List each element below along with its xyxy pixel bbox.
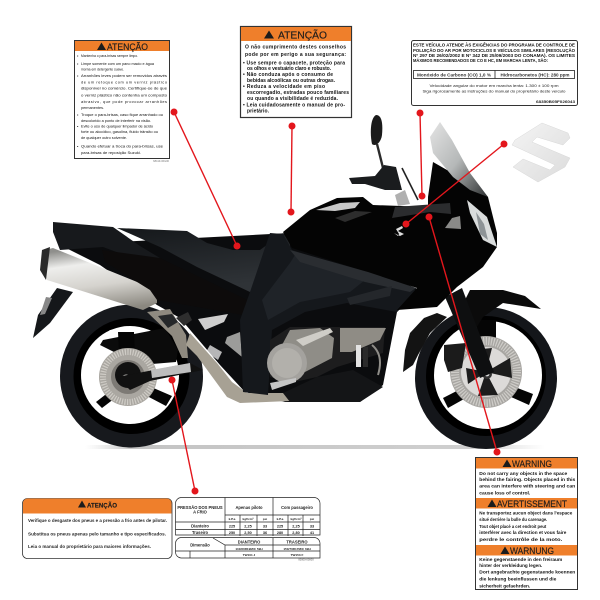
windscreen label text: abrasivo, que pode provocar arranhões xyxy=(81,99,167,104)
windscreen label text: Limpe somente com um pano macio e água xyxy=(81,61,155,66)
table text: 225 xyxy=(229,524,235,528)
table text xyxy=(177,505,314,562)
tail section xyxy=(53,222,160,263)
table text: 110/80R19M/C 59H xyxy=(235,547,263,551)
mirror xyxy=(371,115,383,168)
WARNING text: Do not carry any objects in the space xyxy=(479,471,568,476)
table text: Apenas piloto xyxy=(235,505,263,510)
table text: Dimensão xyxy=(190,542,210,548)
windscreen label text: • xyxy=(77,124,79,128)
rear wheel xyxy=(60,304,203,448)
windscreen label text: • xyxy=(77,53,79,58)
rider label text: prietário. xyxy=(247,108,270,114)
table text: Traseiro xyxy=(192,530,208,535)
windscreen label text: disponível no comércio. Certifique-se de que xyxy=(81,86,167,90)
emissions paragraph: POLUIÇÃO DO AR POR MOTOCICLOS E VEÍCULOS SIMILARES (RESOLUÇÃO xyxy=(413,48,576,53)
motorcycle xyxy=(33,115,557,449)
AVERTISSEMENT text xyxy=(479,510,573,542)
windscreen label text: • xyxy=(77,73,79,78)
table text: kgf/cm² xyxy=(242,517,254,521)
gaps in rear frame xyxy=(198,314,228,330)
WARNUNG text xyxy=(479,557,576,588)
red pointer: emissions label to steering head xyxy=(417,110,425,199)
table text: TRASEIRO xyxy=(286,540,308,544)
WARNUNG text: sicherheit gefaehrden. xyxy=(479,584,530,588)
rider label header: ATENÇÃO xyxy=(278,28,327,42)
tank highlight xyxy=(316,202,360,211)
table text: 33 xyxy=(263,524,267,528)
windscreen label text: • xyxy=(77,144,79,148)
side panel xyxy=(102,250,262,315)
windscreen label text: • xyxy=(77,61,79,66)
table text: 00000-00000 xyxy=(298,558,314,562)
table text: 225 xyxy=(277,524,283,528)
pressure section xyxy=(176,498,320,536)
icon: Suzuki S emblem xyxy=(512,123,570,182)
table text: 150/70R17M/C 69H xyxy=(283,547,311,551)
windscreen label text: Arranhões leves podem ser removidos através xyxy=(81,73,167,78)
rear mudguard xyxy=(33,288,73,338)
tyre warning header: ATENÇÃO xyxy=(87,502,117,510)
fuel tank and fairing xyxy=(283,162,497,310)
rider label text: os olhos e vestuário claro e robusto. xyxy=(247,66,332,72)
rider label text: • Não conduza após o consumo de xyxy=(243,72,333,78)
table text: PRESSÃO DOS PNEUS xyxy=(177,505,223,510)
windscreen label text: Quando efetuar a troca do para-brisas, use xyxy=(81,144,163,148)
red pointer: tyre labels to swingarm xyxy=(169,377,198,494)
handlebar xyxy=(349,165,418,206)
windscreen label text: Troque o para-brisas, caso fique arranhado ou xyxy=(81,112,163,117)
tyre warning text xyxy=(28,518,167,549)
windscreen label text: • xyxy=(77,112,79,117)
windscreen label text: descolorido a ponto de interferir na visão. xyxy=(81,118,151,123)
table text: A FRIO xyxy=(193,510,208,514)
table text: 280 xyxy=(277,531,283,535)
WARNING text: behind the fairing. Objects placed in this xyxy=(479,477,576,482)
silencer xyxy=(42,248,157,310)
emissions limits table: Hidrocarbonetos (HC): 280 ppm xyxy=(500,72,570,77)
WARNUNG header: WARNUNG xyxy=(510,546,554,557)
engine xyxy=(267,327,386,383)
seat xyxy=(117,228,290,292)
emissions limits table xyxy=(414,70,574,78)
red pointer: windscreen label to seat xyxy=(171,109,240,249)
windscreen label text xyxy=(77,53,167,155)
WARNING text: area can interfere with steering and can xyxy=(479,484,576,488)
emissions paragraph xyxy=(413,42,576,63)
rider label text: bebidas alcoólicas ou outras drogas. xyxy=(247,78,336,84)
emissions limits table: Monóxido de Carbono (CO) 1,0 % xyxy=(417,72,491,77)
table text: 2,50 xyxy=(244,531,252,535)
table text: 2,25 xyxy=(244,524,252,528)
windscreen label text: morna em detergente suave. xyxy=(81,66,124,72)
red pointer: rider label to tank xyxy=(288,123,295,215)
windscreen label text: permanentes. xyxy=(81,105,104,110)
windscreen xyxy=(430,122,488,197)
tyre warning text: Substitua os pneus apenas pelo tamanho e tipo especificados. xyxy=(28,532,166,536)
AVERTISSEMENT header: AVERTISSEMENT xyxy=(497,499,567,510)
table text: 41 xyxy=(310,531,314,535)
tyre warning text: Leia o manual do proprietário para maiores informações. xyxy=(28,544,151,549)
panel: multilingual warning label xyxy=(476,458,578,590)
table text: psi xyxy=(310,517,314,521)
table text: 36 xyxy=(263,531,267,535)
table text: kgf/cm² xyxy=(290,517,302,521)
lower fairing panel xyxy=(290,250,416,292)
panel: rider safety warning label xyxy=(240,26,352,118)
WARNING header: WARNING xyxy=(512,459,552,470)
windscreen label text: de um retoque com um verniz plástico xyxy=(81,80,167,84)
exhaust pipe xyxy=(186,333,290,403)
windscreen label text: Mantenha o para-brisas sempre limpo. xyxy=(81,53,138,58)
ground shadow xyxy=(85,445,545,449)
table text: DIANTEIRO xyxy=(238,540,261,544)
rider label text: • Reduza a velocidade em piso xyxy=(243,84,325,90)
table text: 33 xyxy=(310,524,314,528)
red pointer: emblem to fairing badge xyxy=(403,141,507,227)
AVERTISSEMENT text: Ne transportez aucun object dans l'espace xyxy=(479,510,573,516)
panel: windscreen warning label: 68419-06G00 xyxy=(153,159,170,163)
WARNUNG text: Keine gegenstaende in den freiraum xyxy=(479,557,562,562)
table text: Com passageiro xyxy=(281,505,313,510)
front fender xyxy=(403,290,541,372)
windscreen label text: o verniz plástico não contenha um composto xyxy=(81,92,167,98)
Suzuki badge on fairing xyxy=(394,226,404,236)
AVERTISSEMENT text: situé derrière la bulle du carenage. xyxy=(479,517,547,522)
exhaust hanger xyxy=(147,309,188,358)
fairing top trim xyxy=(392,203,451,218)
tyre warning header xyxy=(23,498,172,514)
WARNUNG text: Dort angebrachte gegenstaende koennen xyxy=(479,570,576,574)
front fork xyxy=(445,288,494,378)
AVERTISSEMENT text: Tout objet placé a cet endroit peut xyxy=(479,524,547,529)
panel: tyre pressure table xyxy=(176,498,320,562)
dimension section xyxy=(176,538,320,558)
table text: k.P.a xyxy=(277,517,284,521)
emissions paragraph: MÁXIMOS RECOMENDADOS DE CO E HC, EM MARCHA LENTA, SÃO: xyxy=(413,58,548,63)
windscreen label text: forte ou alcoólico, gasolina, fluido trânsito ou xyxy=(81,129,158,134)
main frame cover xyxy=(240,233,417,395)
table text: psi xyxy=(263,517,267,521)
panel: windscreen warning label xyxy=(74,40,170,163)
footpeg plate xyxy=(225,332,242,357)
rider label text: • Leia cuidadosamente o manual de pro- xyxy=(243,102,345,108)
swingarm xyxy=(117,363,203,390)
vent xyxy=(347,286,392,305)
idle speed note xyxy=(422,83,566,94)
table text: TW101 J xyxy=(243,553,256,557)
table text: TW153 F xyxy=(291,553,303,557)
rider label text xyxy=(243,44,349,114)
idle speed note: Siga rigorosamente as instruções do manual do proprietário deste veículo xyxy=(422,88,566,94)
body backing xyxy=(60,233,420,402)
table text: 250 xyxy=(229,531,235,535)
table text: 2,25 xyxy=(292,524,300,528)
AVERTISSEMENT text: interférer avec la direction et vous faire xyxy=(479,530,567,535)
emissions paragraph: Nº 297 DE 26/02/2002 E Nº 342 DE 25/09/2003 DO CONAMA). OS LIMITES xyxy=(413,53,575,58)
WARNING text xyxy=(479,471,576,496)
rider label text: O não cumprimento destes conselhos xyxy=(245,44,346,50)
WARNUNG text: die lenkung beeinflussen und die xyxy=(479,576,557,582)
headlight xyxy=(467,200,497,247)
idle speed note: Velocidade angular do motor em marcha lenta: 1.300 ± 100 rpm xyxy=(430,83,558,88)
rider label text: pode por em perigo a sua segurança: xyxy=(245,52,346,58)
table text: 2,80 xyxy=(292,531,300,535)
panel: emissions information label xyxy=(412,40,578,106)
footpeg bar xyxy=(270,378,296,390)
tyre warning text: Verifique o desgaste dos pneus e a pressão a frio antes de pilotar. xyxy=(28,518,167,523)
part number: 68350B05F026043 xyxy=(536,99,576,104)
rider label text: • Use sempre o capacete, proteção para xyxy=(243,60,345,66)
rider label text: escorregadio, estradas pouco familiares xyxy=(247,90,349,96)
windscreen label text: de qualquer outro solvente. xyxy=(81,135,127,140)
windscreen label text: Evite o uso de qualquer limpador de ácido xyxy=(81,124,153,128)
WARNUNG text: hinter der verkleidung legen. xyxy=(479,563,542,568)
red pointer: multilingual warning to fairing xyxy=(426,214,500,455)
WARNING text: cause loss of control. xyxy=(479,490,530,496)
undercowl xyxy=(283,370,383,402)
emissions paragraph: ESTE VEÍCULO ATENDE ÀS EXIGÊNCIAS DO PROGRAMA DE CONTROLE DE xyxy=(413,42,575,48)
panel: tyre warning label xyxy=(22,498,172,558)
rider label text: ou quando a visibilidade é reduzida. xyxy=(247,96,339,102)
table text: Dianteiro xyxy=(191,524,209,528)
windscreen label header: ATENÇÃO xyxy=(107,42,148,52)
windscreen label text: para-brisas de reposição Suzuki. xyxy=(81,150,141,155)
AVERTISSEMENT text: perdre le contrôle de la moto. xyxy=(479,537,562,542)
table text: k.P.a xyxy=(229,517,236,521)
front wheel xyxy=(415,307,557,449)
